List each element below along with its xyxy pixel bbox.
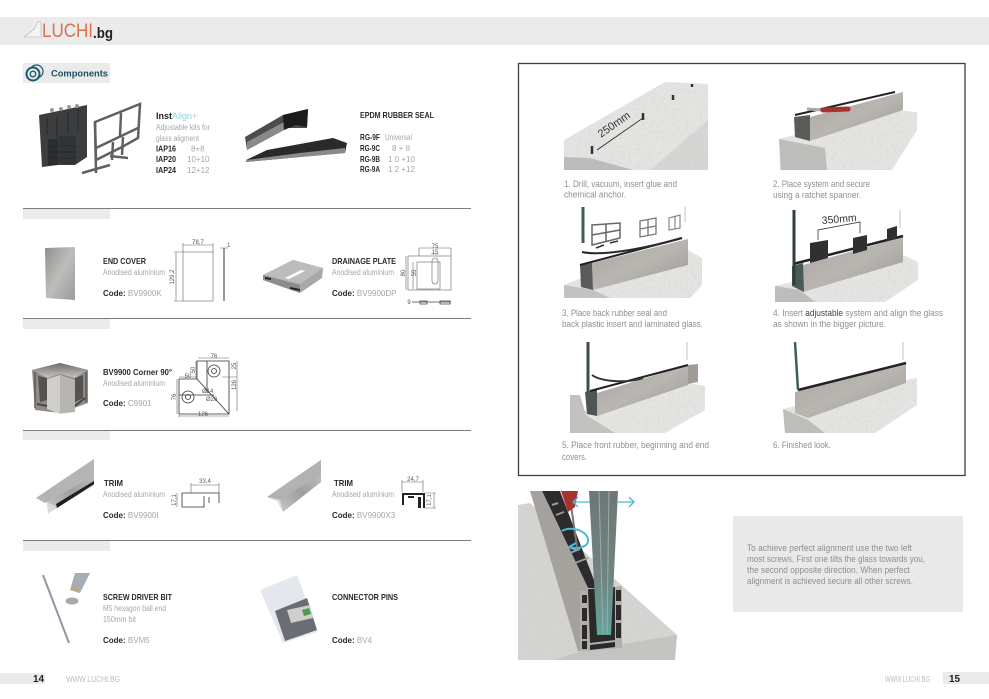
drawing: trim BV9900X3 dimensions: 17,1 <box>427 494 433 506</box>
text: trim BV9900I <box>103 478 165 520</box>
text: screw driver bit <box>103 592 173 645</box>
drawing: end cover dimensions: 78,7 <box>192 240 204 246</box>
drawing: trim BV9900I dimensions <box>172 479 219 507</box>
drawing: drainage plate dimensions: 15 <box>432 250 439 256</box>
text: rubber seal specs: 1 0 +10 <box>388 155 415 164</box>
text: drainage plate <box>332 256 396 298</box>
step 5 caption <box>562 440 709 462</box>
step 5 caption: covers. <box>562 452 587 462</box>
image: alignment block <box>39 104 87 167</box>
text: InstAlign specs: 12+12 <box>187 166 210 175</box>
step 6 caption: 6. Finished look. <box>773 440 831 450</box>
concrete base <box>518 503 677 660</box>
text: trim BV9900I: Code: BV9900I <box>103 511 159 520</box>
text: trim BV9900X3: TRIM <box>334 478 353 488</box>
text: end cover: Anodised aluminium <box>103 268 165 277</box>
step 1 image: anchors in concrete: 250mm <box>596 110 633 140</box>
drawing: corner dimensions: 50 <box>185 374 192 380</box>
drawing: end cover dimensions: 129,2 <box>170 269 176 285</box>
text: drainage plate: Code: BV9900DP <box>332 289 396 298</box>
step 6 image: finished look <box>783 342 917 433</box>
text: InstAlign specs: Adjustable kits for <box>156 123 210 132</box>
step 5 caption: 5. Place front rubber, beginning and end <box>562 440 709 450</box>
text: rubber seal specs: RG-9A <box>360 164 380 174</box>
heading: Components: Components <box>51 68 108 80</box>
image: alignment frame <box>82 104 140 173</box>
text: InstAlign specs: 10+10 <box>187 155 210 164</box>
footer: page 15: WWW.LUCHI.BG <box>885 675 930 684</box>
text: rubber seal specs: Universal <box>385 133 412 142</box>
panel: installation steps <box>518 64 965 476</box>
text: drainage plate: Anodised aluminium <box>332 268 394 277</box>
text: screw driver bit: SCREW DRIVER BIT <box>103 592 173 602</box>
image: trim BV9900I <box>36 459 94 514</box>
arrow: rotation <box>562 529 588 550</box>
image: alignment close-up <box>518 491 677 660</box>
text: InstAlign specs <box>156 111 210 175</box>
divider tag 2 <box>23 318 471 329</box>
step 4 caption: as shown in the bigger picture. <box>773 319 886 329</box>
text: InstAlign specs: IAP20 <box>156 154 176 164</box>
logo <box>24 21 113 42</box>
text: trim BV9900X3: Anodised aluminium <box>332 490 394 499</box>
drawing: trim BV9900I dimensions: 17,1 <box>172 494 178 506</box>
text: rubber seal specs: RG-9F <box>360 132 380 142</box>
step 5 image: front rubber and covers <box>570 342 705 433</box>
text: rubber seal specs: 8 + 8 <box>392 144 411 153</box>
text: screw driver bit: Code: BVM5 <box>103 636 150 645</box>
drawing: drainage plate dimensions <box>401 244 451 306</box>
drawing: corner dimensions: 25 <box>232 362 238 369</box>
step 4 image: adjustable system spacing <box>775 210 918 302</box>
footer: page 15: 15 <box>949 674 961 685</box>
divider tag 4 <box>23 540 471 551</box>
text: trim BV9900I: TRIM <box>104 478 123 488</box>
text: connector pins: Code: BV4 <box>332 636 373 645</box>
text: corner: Anodised aluminium <box>103 379 165 388</box>
text: rubber seal specs: 1 2 +12 <box>388 165 415 174</box>
text: screw driver bit: 150mm bit <box>103 615 137 624</box>
footer: page 14 <box>0 673 120 685</box>
image: bag of connector pins <box>260 575 318 643</box>
callout: alignment instructions: To achieve perfect alignment use the two left <box>747 543 912 553</box>
step 3 caption <box>562 308 703 329</box>
divider tag 1 <box>23 208 471 219</box>
step 1 caption: 1. Drill, vacuum, insert glue and <box>564 179 677 189</box>
step 3 image: seal and kits <box>564 207 702 298</box>
footer: page 15 <box>885 672 989 685</box>
drawing: drainage plate dimensions: 75 <box>432 244 439 250</box>
image: rubber seal <box>245 109 347 162</box>
step 1 caption: chemical anchor. <box>564 190 626 200</box>
image: corner profile <box>32 363 88 414</box>
drawing: corner dimensions <box>172 354 238 418</box>
drawing: trim BV9900X3 dimensions <box>402 477 436 508</box>
text: corner <box>103 367 173 408</box>
text: end cover <box>103 256 165 298</box>
drawing: drainage plate dimensions: 9 <box>407 300 411 306</box>
footer: page 14: 14 <box>33 674 45 685</box>
logo: .bg <box>93 25 113 42</box>
text: end cover: Code: BV9900K <box>103 289 162 298</box>
drawing: corner dimensions: Ø14 <box>202 389 214 395</box>
drawing: drainage plate dimensions: 80 <box>401 269 407 276</box>
step 2 caption: using a ratchet spanner. <box>773 190 861 200</box>
text: drainage plate: DRAINAGE PLATE <box>332 256 396 266</box>
step 2 caption <box>773 179 870 200</box>
image: end cover plate <box>45 247 75 300</box>
text: corner: BV9900 Corner 90° <box>103 367 173 377</box>
rail wall and interior <box>530 491 597 651</box>
text: screw driver bit: M5 hexagon ball end <box>103 604 166 613</box>
panel: InstAlign kit <box>39 104 140 173</box>
text: end cover: END COVER <box>103 256 146 266</box>
step 2 image: rail and ratchet <box>779 92 917 170</box>
text: InstAlign specs: IAP16 <box>156 144 176 154</box>
text: rubber seal specs: EPDM RUBBER SEAL <box>360 110 434 120</box>
text: InstAlign specs: InstAlign+ <box>156 111 197 121</box>
divider tag 3 <box>23 430 471 440</box>
callout: alignment instructions: the second opposite direction. When perfect <box>747 565 910 575</box>
drawing: end cover dimensions <box>170 240 231 301</box>
text: trim BV9900X3 <box>332 478 396 520</box>
arrows: tilt directions <box>573 497 634 507</box>
drawing: trim BV9900I dimensions: 33,4 <box>199 479 211 485</box>
icon: gears <box>26 65 43 80</box>
drawing: corner dimensions: 76 <box>211 354 218 360</box>
callout: alignment instructions: most screws. First one tilts the glass towards you, <box>747 554 925 564</box>
rail cross-section <box>580 586 622 651</box>
step 2 caption: 2. Place system and secure <box>773 179 870 189</box>
step 4 caption <box>773 308 943 329</box>
image: trim BV9900X3 <box>267 460 321 512</box>
text: trim BV9900X3: Code: BV9900X3 <box>332 511 396 520</box>
callout: alignment instructions <box>733 516 963 612</box>
callout: alignment instructions: alignment is achieved secure all other screws. <box>747 576 913 586</box>
screwdriver <box>561 491 578 547</box>
image: screw driver bit <box>43 573 90 643</box>
text: connector pins <box>332 592 398 645</box>
drawing: corner dimensions: Ø26 <box>206 397 218 403</box>
glass panel <box>589 491 618 635</box>
drawing: corner dimensions: 126 <box>198 412 209 418</box>
footer: page 14: WWW.LUCHI.BG <box>66 675 120 684</box>
step 4 caption: 4. Insert adjustable system and align the glass <box>773 308 943 318</box>
text: InstAlign specs: glass aligment <box>156 134 200 143</box>
image: drainage plate <box>263 260 323 293</box>
text: corner: Code: C9901 <box>103 399 152 408</box>
text: rubber seal specs: RG-9C <box>360 143 380 153</box>
logo: LUCHI <box>42 21 93 42</box>
text: connector pins: CONNECTOR PINS <box>332 592 398 602</box>
text: InstAlign specs: IAP24 <box>156 165 176 175</box>
header band <box>0 17 989 45</box>
step 3 caption: back plastic insert and laminated glass. <box>562 319 703 329</box>
drawing: drainage plate dimensions: 55 <box>412 269 418 276</box>
text: InstAlign specs: 8+8 <box>191 144 205 154</box>
text: rubber seal specs <box>360 110 434 174</box>
step 4 image: adjustable system spacing: 350mm <box>821 212 857 227</box>
step 1 image: anchors in concrete <box>564 82 708 170</box>
drawing: corner dimensions: 50 <box>191 366 197 373</box>
drawing: trim BV9900X3 dimensions: 24,7 <box>407 477 419 483</box>
step 3 caption: 3. Place back rubber seal and <box>562 308 667 318</box>
heading: Components <box>23 63 110 83</box>
drawing: corner dimensions: 126 <box>232 379 238 390</box>
step 1 caption <box>564 179 677 200</box>
drawing: end cover dimensions: 1 <box>227 243 231 249</box>
text: trim BV9900I: Anodised aluminium <box>103 490 165 499</box>
drawing: corner dimensions: 76 <box>172 393 178 400</box>
text: rubber seal specs: RG-9B <box>360 154 380 164</box>
